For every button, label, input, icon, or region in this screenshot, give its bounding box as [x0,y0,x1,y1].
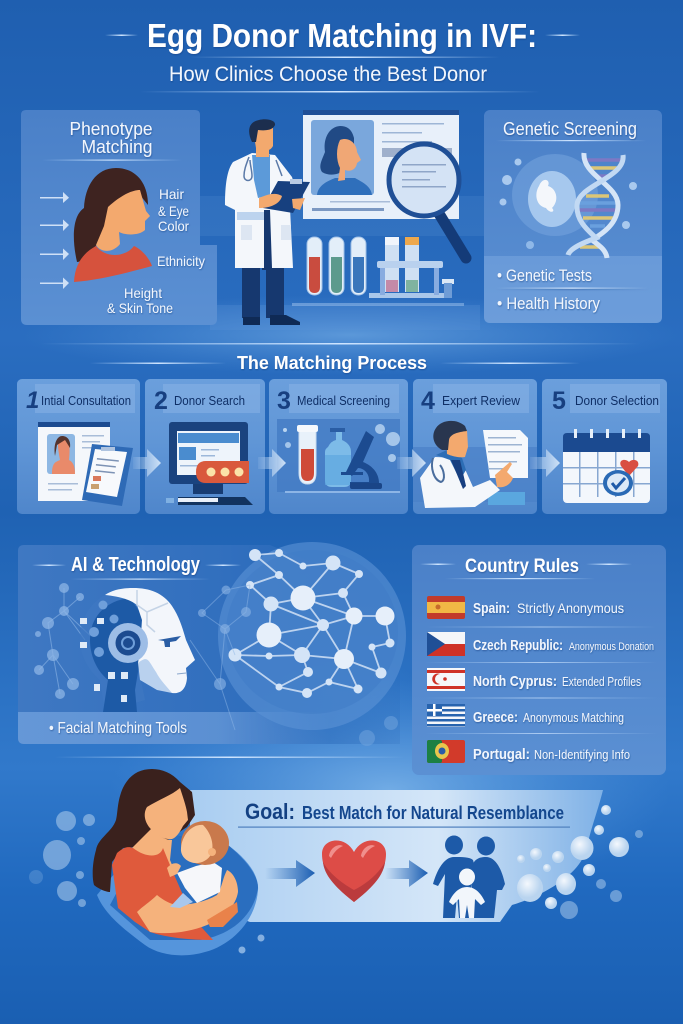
icon: family [433,836,505,918]
row: portugal: Portugal: [473,746,530,763]
row: czech republic: Czech Republic: [473,637,563,654]
step 5: donor selection: Donor Selection [575,393,659,408]
panel: country rules [412,545,666,775]
illustration: donor profile card [303,110,459,219]
row: czech republic: Anonymous Donation [569,641,654,653]
heading: phenotype matching: Phenotype [70,119,152,139]
row: greece [427,704,624,727]
panel: genetic screening [484,110,662,323]
row: north cyprus: North Cyprus: [473,673,557,690]
decorative bubbles left [29,811,95,907]
step 1: initial consultation: 1 [26,387,39,414]
icon: computer monitor [166,422,253,505]
phenotype labels: Height [124,285,162,301]
ellipse: neural network [190,542,406,730]
step 4: expert review: 4 [421,387,435,415]
panel: ai and technology [18,542,406,744]
step 3: medical screening: 3 [277,387,291,415]
arrows: phenotype [40,192,69,289]
process arrows [133,449,560,477]
bullet: facial matching tools: • Facial Matching Tools [49,720,187,737]
step 4: expert review: Expert Review [442,393,521,408]
icon: lab equipment [277,419,400,493]
icon: doctor reviewing document [420,421,528,508]
illustration: test tubes and rack [292,237,464,306]
heading: goal: Goal: [245,799,295,824]
illustration: doctor with clipboard [225,119,310,325]
heading: phenotype matching: Matching [82,137,152,157]
step 5: donor selection [542,379,667,514]
heading: country rules: Country Rules [465,556,579,577]
step 2: donor search: Donor Search [174,393,245,408]
phenotype labels: Ethnicity [157,253,205,269]
phenotype labels: & Eye [158,203,189,219]
row: spain: Strictly Anonymous [517,600,624,616]
arrow: to family [385,860,428,887]
icon: magnifying glass [389,144,466,258]
icon: mother holding baby [93,769,258,955]
genetic list: • Health History [497,295,601,313]
row: czech republic [427,632,654,656]
step 1: initial consultation: Intial Consultation [41,393,131,408]
icon: embryo [500,154,598,236]
icon: ai head [34,583,195,712]
heading: goal [238,799,570,828]
phenotype labels [107,186,205,316]
icon: woman profile [74,168,152,282]
subtitle: How Clinics Choose the Best Donor [169,63,487,86]
row: portugal [427,740,630,763]
icon: profile and clipboard [38,422,133,506]
row: spain [427,596,624,619]
step 4: expert review [413,379,537,514]
step 2: donor search [145,379,265,514]
arrow: to heart [265,860,315,887]
icon: calendar [563,429,650,503]
heading: the matching process: The Matching Process [237,352,427,373]
heading: genetic screening: Genetic Screening [503,119,637,139]
icon: heart [322,841,386,902]
banner: goal [190,790,603,922]
heading: phenotype matching [42,119,182,161]
row: north cyprus [427,668,641,691]
row: greece: Anonymous Matching [523,710,624,725]
step 5: donor selection: 5 [552,387,566,415]
decorative bubbles right [517,805,643,919]
heading: goal: Best Match for Natural Resemblance [302,802,564,823]
row: north cyprus: Extended Profiles [562,674,641,689]
phenotype labels: & Skin Tone [107,300,173,316]
panel: phenotype matching [21,110,217,325]
step 3: medical screening: Medical Screening [297,393,390,408]
row: greece: Greece: [473,709,518,726]
genetic list: • Genetic Tests [497,267,592,285]
genetic list [496,267,648,313]
phenotype labels: Hair [159,186,184,202]
step 3: medical screening [269,379,408,514]
step 2: donor search: 2 [154,387,168,415]
row: spain: Spain: [473,600,510,617]
icon: dna helix [568,153,623,258]
step 1: initial consultation [17,379,140,514]
phenotype labels: Color [158,218,189,234]
heading: ai and technology: AI & Technology [71,554,201,576]
row: portugal: Non-Identifying Info [534,747,630,762]
title: Egg Donor Matching in IVF: [147,17,537,54]
